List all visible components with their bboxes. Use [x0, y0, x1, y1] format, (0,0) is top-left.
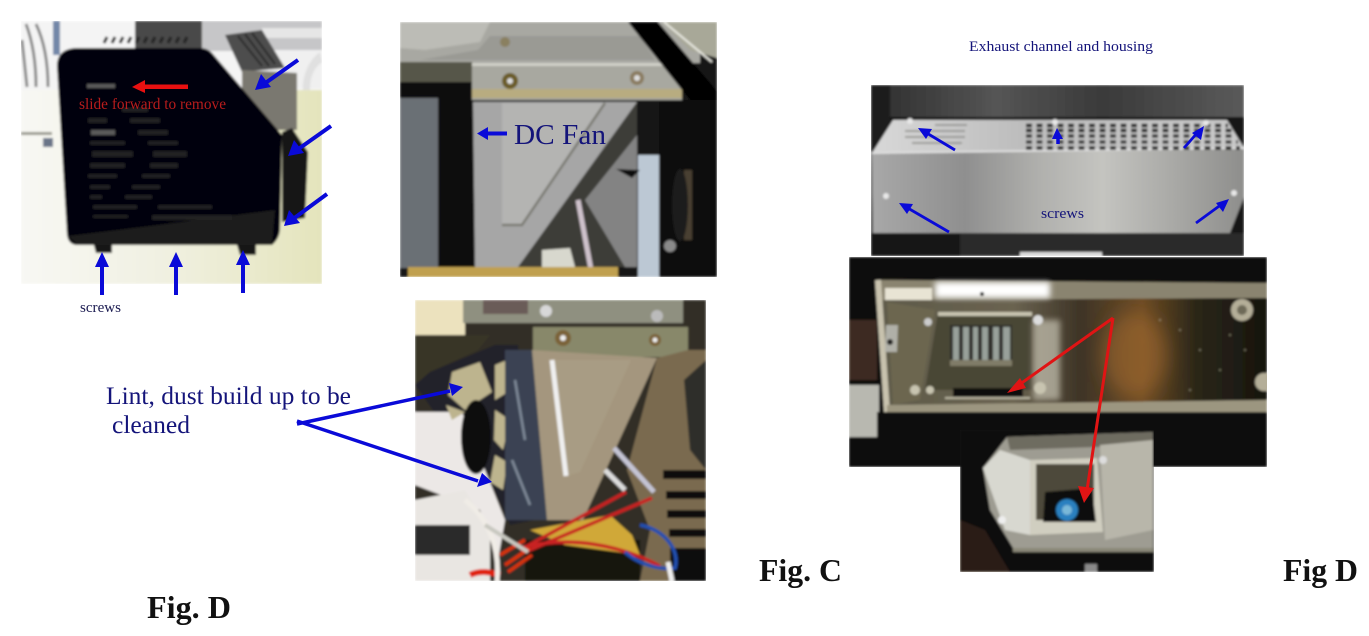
annotation: lint arrows: [297, 383, 492, 487]
annotation: slide forward to remove: slide forward to remove: [79, 96, 226, 113]
photo: exhaust housing with screws: [871, 85, 1244, 256]
heading: exhaust channel and housing: Exhaust channel and housing: [969, 39, 1154, 55]
label: screws on housing: screws: [1041, 206, 1084, 222]
photo: exhaust fan close-up: [960, 430, 1154, 572]
label: lint and dust callout: Lint, dust build up to be: [106, 381, 351, 410]
heading: Fig. D left: Fig. D: [147, 589, 231, 625]
heading: Fig D right: Fig D: [1283, 552, 1358, 588]
label: screws: screws: [80, 300, 121, 316]
photo: oven side view with arrows: [21, 21, 331, 295]
heading: Fig. C: Fig. C: [759, 552, 842, 588]
annotation: DC Fan: DC Fan: [514, 119, 606, 151]
annotation: red arrows to fans: [1007, 318, 1113, 503]
photo: DC fan: [400, 22, 717, 277]
photo: open exhaust channel with blower: [849, 257, 1273, 467]
photo: lint and dust build up: [415, 300, 706, 581]
annotation: DC Fan arrow: [477, 127, 507, 140]
label: lint and dust callout: cleaned: [112, 410, 190, 439]
label: lint and dust callout: [106, 381, 351, 439]
annotation: red slide arrow: [132, 80, 188, 93]
annotation: blue screw arrows: [899, 126, 1229, 232]
annotation: blue arrows to screws: [95, 60, 331, 295]
